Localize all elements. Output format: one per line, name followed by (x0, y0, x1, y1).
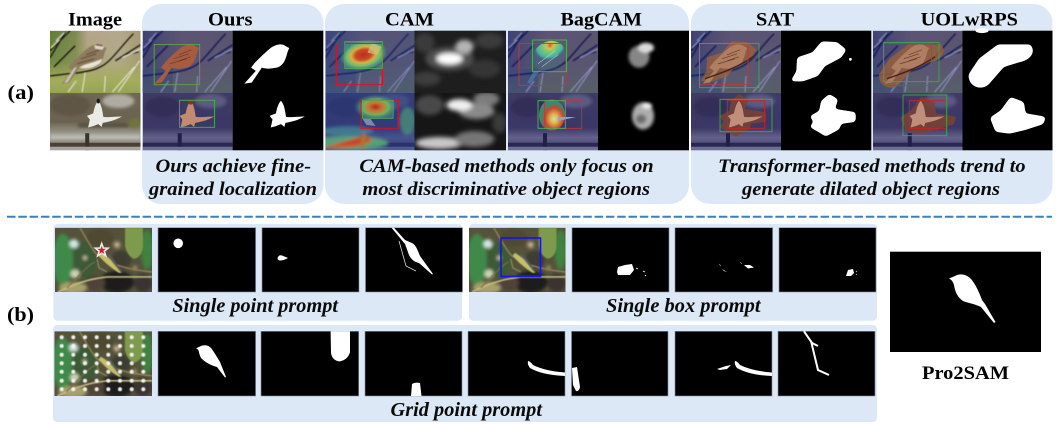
mask: grid result stub (365, 331, 462, 396)
caption: Transformer-based methods: Transformer-based methods trend to (718, 156, 1026, 177)
caption: CAM-based methods (359, 156, 654, 200)
caption: CAM-based methods: most discriminative object regions (362, 179, 650, 200)
mask: SAT bottom (781, 93, 871, 150)
heatmap: CAM top (414, 30, 506, 93)
heading: UOLwRPS: UOLwRPS (921, 11, 1018, 31)
mask: grid result branch (468, 331, 565, 396)
caption: Single point prompt: Single point prompt (172, 296, 339, 317)
caption: Transformer-based methods: generate dilated object regions (741, 179, 1000, 200)
caption: Ours: Ours achieve fine- (156, 156, 311, 177)
overlay: UOLwRPS bottom (873, 93, 962, 150)
heading: CAM: CAM (385, 11, 434, 31)
overlay: BagCAM bottom (508, 93, 598, 150)
heatmap: BagCAM top (598, 30, 689, 93)
mask: box result 2 (675, 228, 773, 292)
heading: BagCAM: BagCAM (560, 11, 642, 31)
panel: Single box prompt (467, 224, 877, 321)
overlay: BagCAM top (508, 31, 598, 93)
mask: Pro2SAM (890, 252, 1041, 352)
panel: CAM-based methods (312, 4, 689, 204)
mask: box result 1 (572, 228, 669, 292)
label: Pro2SAM: Pro2SAM (922, 364, 1009, 384)
caption: CAM-based methods: CAM-based methods only focus on (359, 156, 654, 177)
mask: grid result bird (158, 331, 256, 396)
mask: grid result twig (778, 331, 875, 396)
overlay: SAT top (691, 31, 781, 93)
panel: Ours (142, 4, 324, 204)
overlay: CAM top (326, 30, 414, 93)
heatmap: CAM bottom (414, 93, 506, 150)
heading: Image: Image (68, 11, 122, 31)
mask: grid result leaf (261, 331, 359, 396)
overlay: UOLwRPS top (873, 31, 962, 93)
mask: Ours top (233, 31, 323, 93)
panel label (a): (a) (8, 82, 34, 104)
caption: Ours (148, 156, 317, 200)
mask: UOLwRPS bottom (962, 93, 1052, 150)
mask: Ours bottom (233, 93, 323, 150)
mask: SAT top (781, 31, 871, 93)
panel: Transformer-based methods (691, 4, 1052, 204)
photo: box prompt with blue rectangle (467, 228, 566, 294)
caption: Ours: grained localization (148, 179, 317, 200)
photo: sparrow on branch (50, 31, 140, 93)
column: Image (50, 11, 142, 150)
overlay: SAT bottom (691, 93, 781, 150)
mask: point result 1 (158, 228, 256, 292)
photo: gull in flight (50, 93, 142, 150)
caption: Grid point prompt: Grid point prompt (390, 400, 543, 421)
overlay: CAM bottom (326, 93, 414, 150)
heatmap: BagCAM bottom (598, 93, 689, 150)
photo: point prompt with red star (53, 228, 153, 294)
mask: grid result leaf and branch (675, 331, 772, 396)
mask: point result 2 (262, 228, 359, 292)
mask: UOLwRPS top (962, 28, 1052, 93)
overlay: Ours bottom (143, 93, 233, 150)
panel label (b): (b) (7, 304, 34, 326)
mask: box result 3 (779, 228, 876, 292)
overlay: Ours top (143, 31, 233, 93)
heading: SAT: SAT (756, 11, 795, 31)
mask: point result 3 (366, 228, 462, 292)
panel: Single point prompt (53, 224, 462, 321)
panel: Pro2SAM result (890, 252, 1041, 384)
panel: Grid point prompt (52, 325, 877, 422)
photo: grid of prompt points (52, 331, 153, 398)
caption: Single box prompt: Single box prompt (606, 296, 761, 317)
heading: Ours: Ours (208, 11, 252, 31)
mask: grid result stick (572, 331, 668, 396)
caption: Transformer-based methods (718, 156, 1026, 200)
